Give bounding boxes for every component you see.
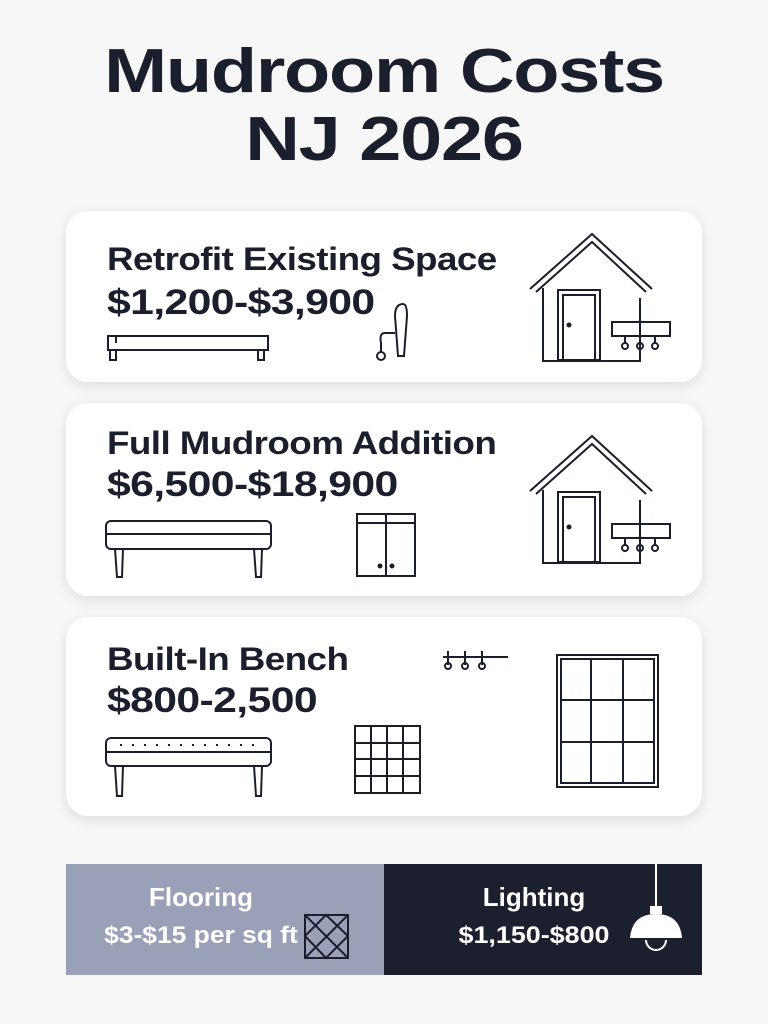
heading: addition: Full Mudroom Addition — [107, 425, 496, 461]
panel: lighting — [384, 864, 702, 975]
icon: house 1 — [530, 234, 670, 361]
icon: hook rail — [443, 651, 508, 669]
panel: full addition — [66, 403, 702, 596]
title: Mudroom Costs — [104, 37, 664, 106]
icon: tufted bench — [106, 738, 271, 796]
heading: retrofit: Retrofit Existing Space — [107, 241, 497, 277]
panel: flooring: $3-$15 per sq ft — [104, 922, 298, 949]
icon: pendant lamp — [630, 864, 682, 951]
icon: house 2 — [530, 436, 670, 563]
price: addition: $6,500-$18,900 — [107, 465, 398, 504]
panel: retrofit — [66, 211, 702, 382]
price: retrofit: $1,200-$3,900 — [107, 283, 375, 322]
text: lighting: Lighting — [483, 882, 585, 912]
text: flooring: Flooring — [149, 882, 253, 912]
icon: lockers — [557, 655, 658, 787]
icon: bench 2 — [106, 521, 271, 577]
title — [104, 37, 664, 174]
icon: tile — [304, 914, 350, 960]
icon: flat bench — [108, 336, 268, 360]
panel: flooring — [66, 864, 384, 975]
heading: bench: Built-In Bench — [107, 641, 348, 677]
price: bench: $800-2,500 — [107, 681, 317, 720]
panel: lighting: $1,150-$800 — [459, 922, 609, 949]
title: NJ 2026 — [245, 105, 523, 174]
panel: bench — [66, 617, 702, 816]
icon: cubby grid — [355, 726, 420, 793]
icon: cabinet — [357, 514, 415, 576]
icon: hook — [377, 304, 407, 360]
